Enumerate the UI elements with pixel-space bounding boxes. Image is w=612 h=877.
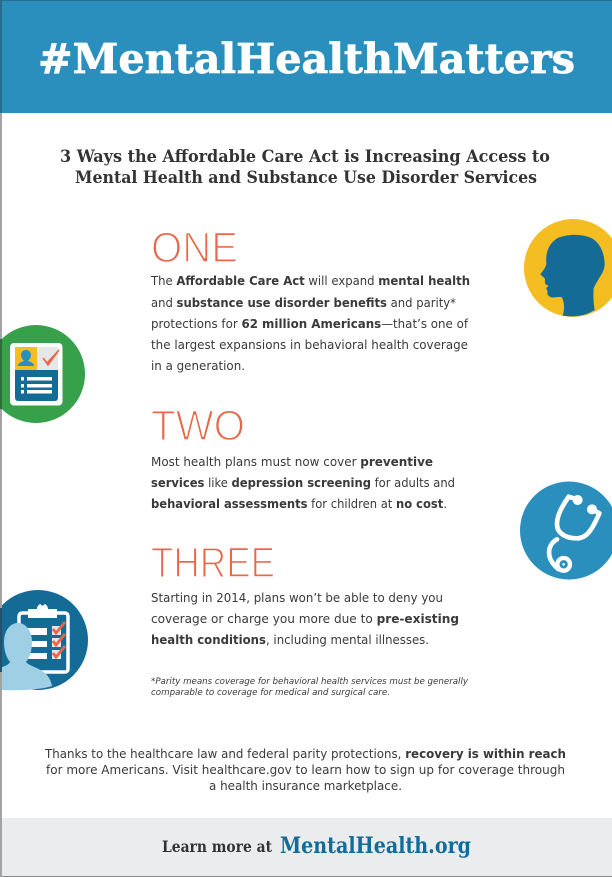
left page edge: [0, 113, 2, 877]
heading: two: TWO: [151, 402, 245, 450]
icon: profile form on green circle: [0, 325, 85, 423]
footer link: MentalHealth.org: [280, 833, 471, 859]
text block: three: [151, 590, 459, 647]
footer band: [0, 818, 612, 877]
closing statement: a health insurance marketplace.: [209, 778, 402, 793]
footnote: [151, 677, 469, 698]
text block: three: coverage or charge you more due to pre-existing: [151, 611, 459, 626]
icon: stethoscope on blue circle: [520, 482, 612, 580]
text block: two: [151, 454, 455, 511]
section one: [150, 224, 470, 373]
subtitle: [60, 147, 550, 188]
text block: one: the largest expansions in behavioral health coverage: [151, 337, 468, 352]
icon: head silhouette on yellow circle: [524, 219, 612, 317]
heading: three: THREE: [151, 539, 275, 587]
text block: three: health conditions, including mental illnesses.: [151, 632, 429, 647]
text block: two: Most health plans must now cover preventive: [151, 454, 433, 469]
section two: [151, 402, 455, 511]
closing statement: [44, 746, 566, 793]
text block: one: protections for 62 million Americans—that’s one of: [151, 316, 469, 331]
closing statement: for more Americans. Visit healthcare.gov to learn how to sign up for coverage through: [46, 762, 565, 777]
closing statement: Thanks to the healthcare law and federal parity protections, recovery is within reach: [44, 746, 566, 761]
heading: one: ONE: [151, 224, 238, 272]
title: #MentalHealthMatters: [38, 35, 575, 83]
text block: two: services like depression screening for adults and: [151, 475, 455, 490]
footnote: comparable to coverage for medical and surgical care.: [151, 688, 390, 698]
text block: two: behavioral assessments for children at no cost.: [151, 496, 447, 511]
text block: three: Starting in 2014, plans won’t be able to deny you: [151, 590, 443, 605]
header banner: [0, 0, 612, 113]
footnote: *Parity means coverage for behavioral health services must be generally: [151, 677, 469, 687]
icon: clipboard and person on blue circle: [0, 590, 88, 690]
text block: one: and substance use disorder benefits and parity*: [151, 295, 456, 310]
footer text: Learn more at: [162, 837, 273, 856]
text block: one: The Affordable Care Act will expand mental health: [150, 273, 470, 288]
subtitle: 3 Ways the Affordable Care Act is Increasing Access to: [60, 147, 550, 167]
section three: [151, 539, 459, 647]
subtitle: Mental Health and Substance Use Disorder Services: [75, 168, 537, 188]
text block: one: [150, 273, 470, 373]
text block: one: in a generation.: [151, 358, 245, 373]
